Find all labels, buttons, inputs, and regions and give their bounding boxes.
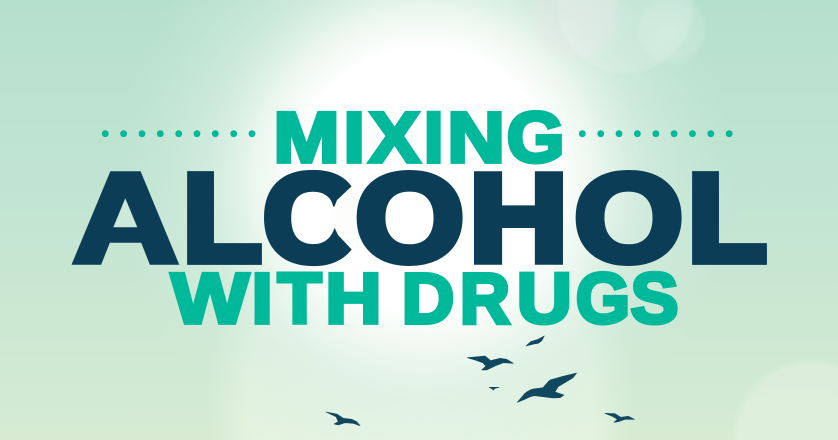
icon: large bird: [517, 373, 577, 402]
title: Mixing Alcohol With Drugs: [74, 97, 767, 339]
heading line: MIXING: M: [273, 98, 340, 177]
heading line: MIXING: [273, 97, 564, 178]
icon: lower right bird: [605, 413, 634, 422]
heading line: ALCOHOL: C: [263, 149, 357, 288]
heading line: WITH DRUGS: S: [631, 259, 678, 339]
icon: medium bird: [467, 356, 513, 370]
heading line: WITH DRUGS: D: [402, 260, 454, 339]
heading line: ALCOHOL: A: [74, 149, 177, 288]
dotted rule: left of MIXING: [102, 130, 255, 137]
dotted rule: right of MIXING: [579, 130, 733, 137]
icon: lower left bird: [326, 412, 360, 426]
heading line: WITH DRUGS: R: [460, 258, 510, 338]
icon: tiny bird: [489, 387, 499, 390]
heading line: WITH DRUGS: U: [517, 258, 572, 338]
heading line: MIXING: N: [447, 99, 505, 178]
icon: flock of birds: [326, 336, 634, 426]
heading line: ALCOHOL: [74, 148, 767, 288]
heading line: WITH DRUGS: G: [576, 258, 630, 338]
heading line: ALCOHOL: L: [182, 149, 262, 288]
heading line: WITH DRUGS: [171, 258, 678, 339]
heading line: WITH DRUGS: W: [171, 259, 249, 339]
heading line: WITH DRUGS: T: [278, 259, 321, 339]
heading line: ALCOHOL: O: [574, 149, 683, 288]
heading line: MIXING: I: [424, 97, 443, 177]
heading line: ALCOHOL: H: [469, 148, 568, 288]
heading line: MIXING: X: [369, 97, 420, 177]
icon: upper small bird: [526, 336, 544, 346]
heading line: MIXING: G: [507, 98, 564, 178]
heading line: WITH DRUGS: H: [325, 258, 382, 338]
heading line: MIXING: I: [344, 98, 365, 177]
heading line: ALCOHOL: O: [355, 149, 464, 288]
heading line: ALCOHOL: L: [688, 149, 767, 288]
heading line: WITH DRUGS: I: [252, 259, 273, 338]
